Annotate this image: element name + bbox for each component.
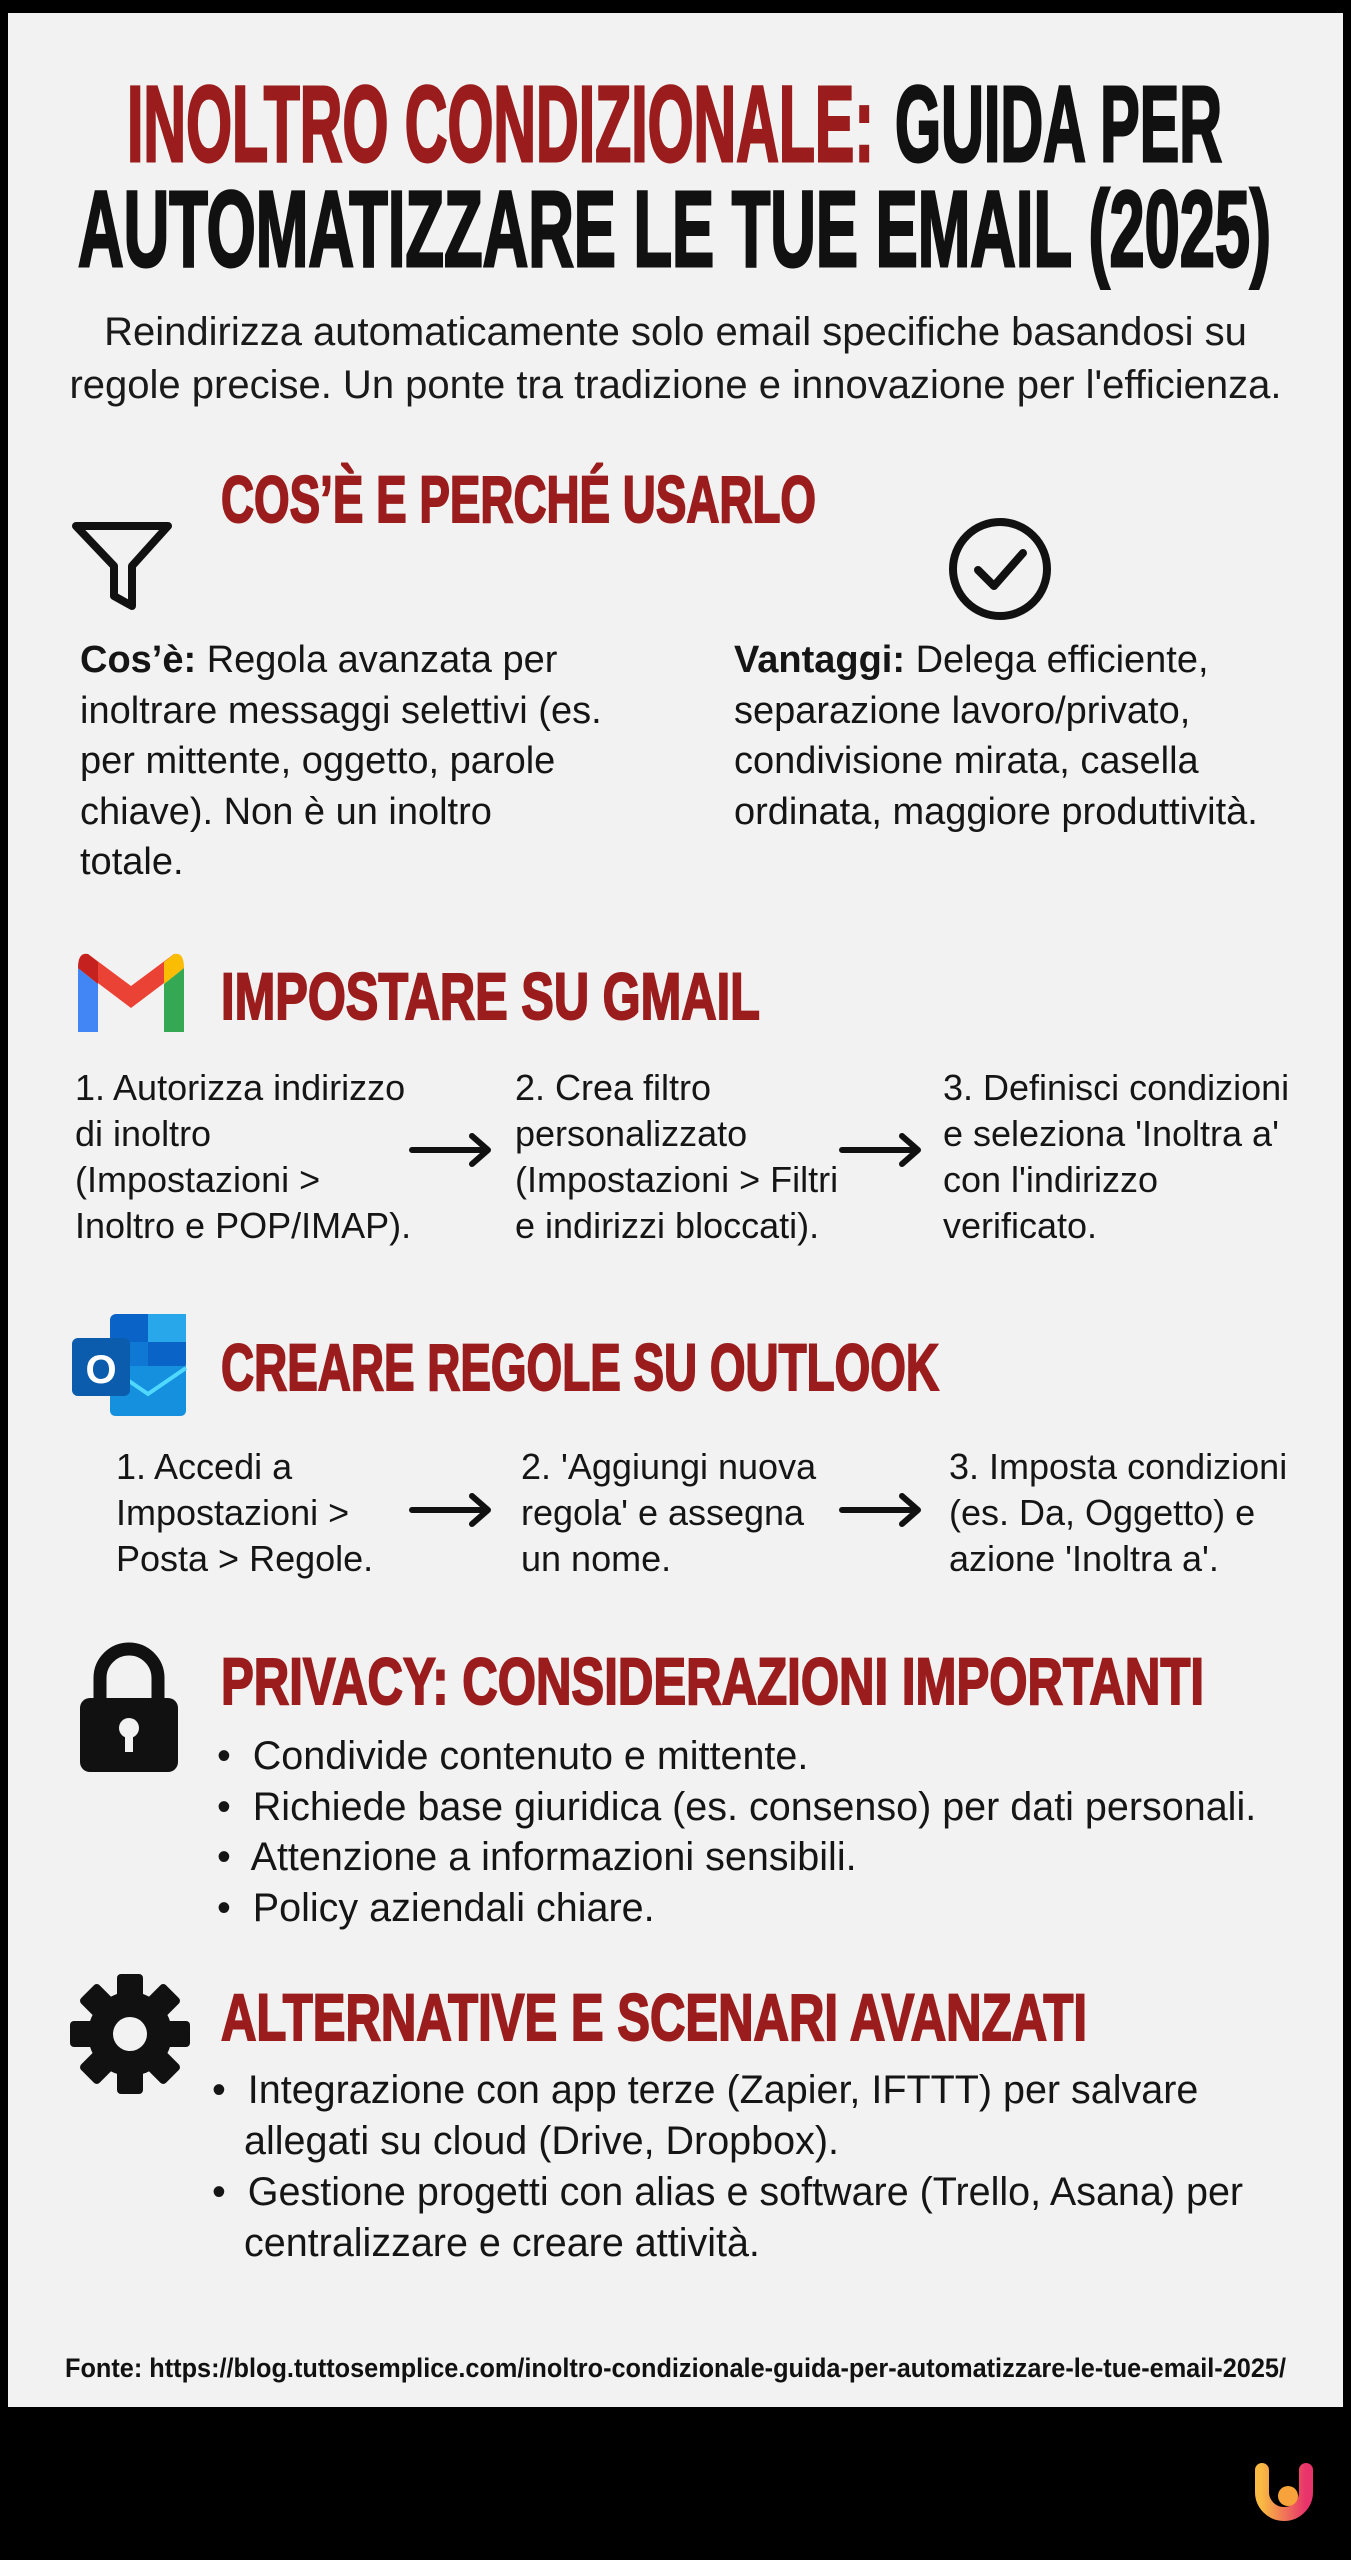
icon: outlook: O: [85, 1348, 117, 1392]
step 2: 2. 'Aggiungi nuova: [521, 1446, 816, 1487]
alternative bullets: [212, 2068, 1243, 2265]
icon: check circle: [949, 518, 1051, 620]
subtitle: regole precise. Un ponte tra tradizione e innovazione per l'efficienza.: [69, 363, 1282, 407]
step 1: [116, 1446, 373, 1579]
step 3: e seleziona 'Inoltra a': [943, 1113, 1279, 1154]
step 1: 1. Accedi a: [116, 1446, 292, 1487]
gmail steps: [75, 1067, 1289, 1246]
arrow 1: [409, 1133, 491, 1167]
step 3: [943, 1067, 1289, 1246]
subtitle: [69, 310, 1282, 407]
step 2: e indirizzi bloccati).: [515, 1205, 819, 1246]
title: [78, 63, 1271, 290]
alternative bullets: centralizzare e creare attività.: [244, 2221, 760, 2265]
text: cos'è: totale.: [80, 841, 184, 883]
text: vantaggi: condivisione mirata, casella: [734, 740, 1199, 782]
alternative bullets: • Gestione progetti con alias e software (Trello, Asana) per: [212, 2170, 1243, 2214]
step 1: di inoltro: [75, 1113, 211, 1154]
text: cos'è: chiave). Non è un inoltro: [80, 790, 492, 832]
privacy bullets: • Richiede base giuridica (es. consenso) per dati personali.: [217, 1784, 1256, 1828]
arrow 2: [839, 1493, 921, 1527]
step 1: (Impostazioni >: [75, 1159, 320, 1200]
icon: funnel: [72, 522, 172, 610]
step 3: (es. Da, Oggetto) e: [949, 1492, 1255, 1533]
alternative bullets: allegati su cloud (Drive, Dropbox).: [244, 2119, 839, 2163]
icon: outlook: [72, 1314, 188, 1416]
privacy bullets: • Attenzione a informazioni sensibili.: [217, 1835, 857, 1879]
outlook steps: [116, 1446, 1287, 1579]
text: vantaggi: Vantaggi: Delega efficiente,: [734, 639, 1209, 681]
step 3: azione 'Inoltra a'.: [949, 1538, 1219, 1579]
step 3: verificato.: [943, 1205, 1097, 1246]
logo: [1255, 2463, 1313, 2521]
privacy bullets: • Condivide contenuto e mittente.: [217, 1734, 808, 1778]
step 2: [515, 1067, 838, 1246]
step 1: Inoltro e POP/IMAP).: [75, 1205, 411, 1246]
text: cos'è: Cos’è: Regola avanzata per: [80, 639, 557, 681]
text: cos'è: inoltrare messaggi selettivi (es.: [80, 690, 602, 732]
step 3: 3. Imposta condizioni: [949, 1446, 1287, 1487]
privacy bullets: • Policy aziendali chiare.: [217, 1886, 655, 1930]
step 2: (Impostazioni > Filtri: [515, 1159, 838, 1200]
text: vantaggi: separazione lavoro/privato,: [734, 690, 1190, 732]
privacy bullets: [217, 1734, 1256, 1930]
alternative bullets: • Integrazione con app terze (Zapier, IFTTT) per salvare: [212, 2068, 1198, 2112]
step 1: 1. Autorizza indirizzo: [75, 1067, 405, 1108]
text: cos'è: per mittente, oggetto, parole: [80, 740, 555, 782]
step 1: Impostazioni >: [116, 1492, 349, 1533]
icon: gmail: [78, 954, 184, 1032]
step 1: Posta > Regole.: [116, 1538, 373, 1579]
subtitle: Reindirizza automaticamente solo email specifiche basandosi su: [104, 310, 1247, 354]
step 2: [521, 1446, 816, 1579]
step 1: [75, 1067, 411, 1246]
arrow 2: [839, 1133, 921, 1167]
arrow 1: [409, 1493, 491, 1527]
step 2: un nome.: [521, 1538, 671, 1579]
step 3: 3. Definisci condizioni: [943, 1067, 1289, 1108]
icon: gear: [70, 1974, 190, 2094]
text: vantaggi: ordinata, maggiore produttività.: [734, 790, 1258, 832]
icon: lock: [80, 1642, 178, 1772]
text: cos'è: [80, 639, 602, 883]
step 2: regola' e assegna: [521, 1492, 804, 1533]
step 2: 2. Crea filtro: [515, 1067, 711, 1108]
text: vantaggi: [734, 639, 1258, 832]
step 3: con l'indirizzo: [943, 1159, 1158, 1200]
step 3: [949, 1446, 1287, 1579]
step 2: personalizzato: [515, 1113, 747, 1154]
